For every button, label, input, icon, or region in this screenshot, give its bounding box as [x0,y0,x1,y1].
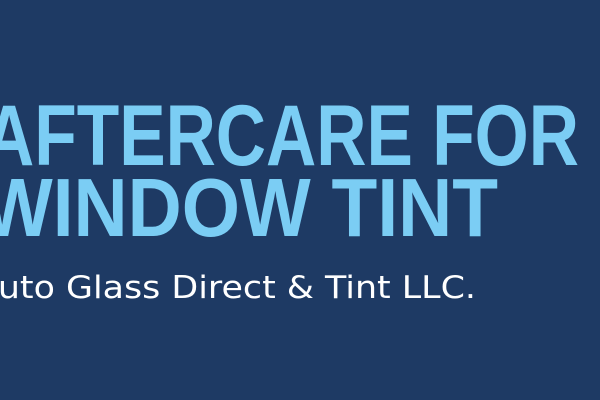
title [0,86,579,254]
title: AFTERCARE FOR [0,86,579,184]
